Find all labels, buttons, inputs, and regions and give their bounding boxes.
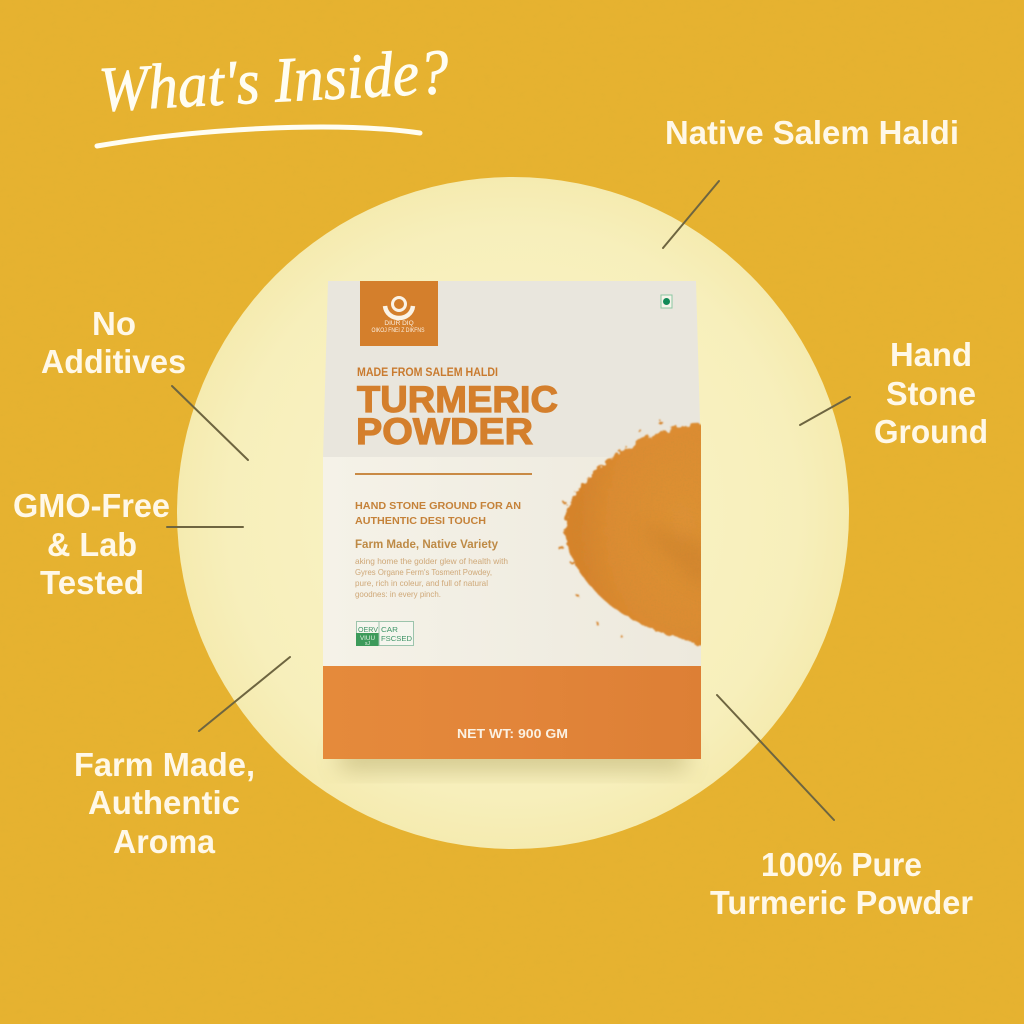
- orange base band: [323, 666, 701, 759]
- label: Hand Stone Ground: Hand: [890, 336, 972, 373]
- label: No Additives: Additives: [41, 343, 186, 380]
- logo wording: [372, 320, 425, 334]
- description: goodnes: in every pinch.: [355, 589, 441, 599]
- tagline: [355, 500, 521, 527]
- label: 100% Pure Turmeric Powder: 100% Pure: [761, 846, 922, 883]
- label: Native Salem Haldi: Native Salem Haldi: [665, 114, 959, 151]
- certification badge: FSCSED: [381, 634, 413, 643]
- label: Farm Made, Authentic Aroma: Authentic: [88, 784, 240, 821]
- label: GMO-Free and Lab Tested: Tested: [40, 564, 144, 601]
- turmeric powder pile: [558, 421, 712, 648]
- divider rule: [355, 473, 532, 475]
- label: No Additives: No: [92, 305, 136, 342]
- certification badge: [356, 621, 414, 647]
- leader lines: [167, 181, 850, 820]
- label: GMO-Free and Lab Tested: GMO-Free: [13, 487, 170, 524]
- tagline: HAND STONE GROUND FOR AN: [355, 500, 521, 512]
- label: No Additives: [41, 305, 186, 380]
- variety line: Farm Made, Native Variety: [355, 539, 499, 551]
- description: [355, 556, 508, 599]
- box upper panel: [323, 281, 701, 458]
- veg mark: [661, 295, 672, 308]
- title underline: [97, 127, 420, 146]
- net weight: NET WT: 900 GM: [457, 726, 568, 741]
- description: pure, rich in coleur, and full of natural: [355, 578, 488, 588]
- certification badge: OERV: [358, 625, 378, 634]
- logo wording: OIKOJ FNEI Z DIKFNS: [372, 327, 425, 334]
- logo wording: DIUR DIQ: [384, 320, 414, 327]
- title: What's Inside?: What's Inside?: [97, 36, 450, 125]
- tagline: AUTHENTIC DESI TOUCH: [355, 515, 486, 527]
- product name: [356, 379, 558, 452]
- description: aking home the golder glew of health with: [355, 556, 508, 566]
- description: Gyres Organe Ferm's Tosment Powdey,: [355, 567, 492, 577]
- label: Hand Stone Ground: [874, 336, 988, 450]
- label: Hand Stone Ground: Stone: [886, 375, 976, 412]
- box shadow: [340, 745, 686, 769]
- product name: TURMERIC: [357, 379, 558, 420]
- label: GMO-Free and Lab Tested: [13, 487, 170, 601]
- certification badge: CAR: [381, 625, 399, 634]
- label: GMO-Free and Lab Tested: & Lab: [47, 526, 137, 563]
- logo tile: [360, 281, 438, 346]
- product box: [323, 281, 712, 769]
- logo icon: [385, 298, 413, 318]
- certification badge: sJ: [365, 641, 370, 647]
- product name: POWDER: [356, 411, 533, 452]
- label: 100% Pure Turmeric Powder: Turmeric Powder: [710, 884, 973, 921]
- pale yellow circle: [177, 177, 849, 849]
- powder specks: [558, 421, 663, 638]
- box lower panel: [323, 457, 701, 667]
- label: Hand Stone Ground: Ground: [874, 413, 988, 450]
- label: Farm Made, Authentic Aroma: Aroma: [113, 823, 216, 860]
- label: Farm Made, Authentic Aroma: Farm Made,: [74, 746, 255, 783]
- certification badge: VIUU: [360, 635, 375, 642]
- subheading: made from Salem Haldi: MADE FROM SALEM HALDI: [357, 367, 498, 379]
- label: 100% Pure Turmeric Powder: [710, 846, 973, 921]
- label: Farm Made, Authentic Aroma: [74, 746, 255, 860]
